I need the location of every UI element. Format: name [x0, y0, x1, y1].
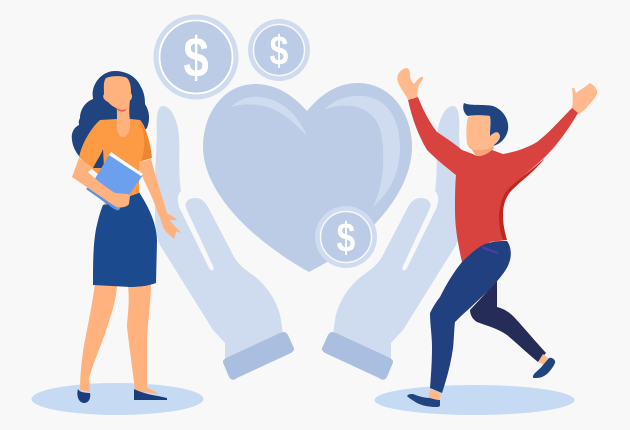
- hair behind arm: [93, 149, 104, 168]
- man: [397, 68, 597, 407]
- hair: [72, 71, 149, 168]
- left cuff: [223, 332, 294, 380]
- heart: [203, 83, 412, 272]
- coin: small top: [248, 19, 310, 81]
- coin: on heart: [315, 206, 377, 268]
- front shoe: [407, 394, 440, 407]
- book cover: [93, 155, 143, 209]
- ground shadow: woman: [32, 383, 204, 415]
- ground shadow: man: [374, 385, 574, 415]
- woman: [72, 71, 181, 403]
- left shoe: [77, 389, 90, 403]
- front foot: [428, 389, 441, 402]
- back leg: [470, 281, 546, 362]
- right cuff: [322, 332, 393, 380]
- left hand: [397, 68, 423, 100]
- front leg: [430, 241, 511, 393]
- heart highlight left: [231, 97, 307, 136]
- coin: on heart: $: [337, 216, 355, 262]
- book pages: [108, 152, 143, 178]
- coin: large: $: [183, 25, 209, 89]
- smile mark: [115, 107, 127, 112]
- right supporting hand: [322, 106, 461, 380]
- back foot: [538, 354, 548, 365]
- left leg: [80, 284, 117, 392]
- finger gap: [402, 191, 438, 270]
- book: [86, 152, 143, 210]
- shirt sleeve shade: [140, 122, 152, 161]
- sweater: [408, 97, 578, 262]
- neck and neckline: [116, 100, 130, 137]
- right hand: [572, 83, 597, 114]
- finger gap: [178, 191, 214, 270]
- shirt: [79, 119, 151, 205]
- right leg: [127, 283, 159, 394]
- book back cover: [86, 182, 121, 210]
- left arm: [72, 158, 130, 207]
- right arm: [139, 159, 181, 239]
- neck: [472, 140, 494, 159]
- hair: [463, 103, 508, 146]
- sweater shade: [499, 158, 545, 240]
- right shoe: [134, 389, 167, 400]
- face: [466, 115, 500, 150]
- coin: large: [154, 14, 238, 100]
- pocket: [482, 246, 498, 254]
- face: [103, 76, 132, 108]
- back shoe: [533, 358, 555, 378]
- skirt: [93, 192, 157, 287]
- left supporting hand: [155, 106, 294, 380]
- coin: small top: $: [270, 29, 288, 75]
- heart highlight right: [324, 96, 400, 207]
